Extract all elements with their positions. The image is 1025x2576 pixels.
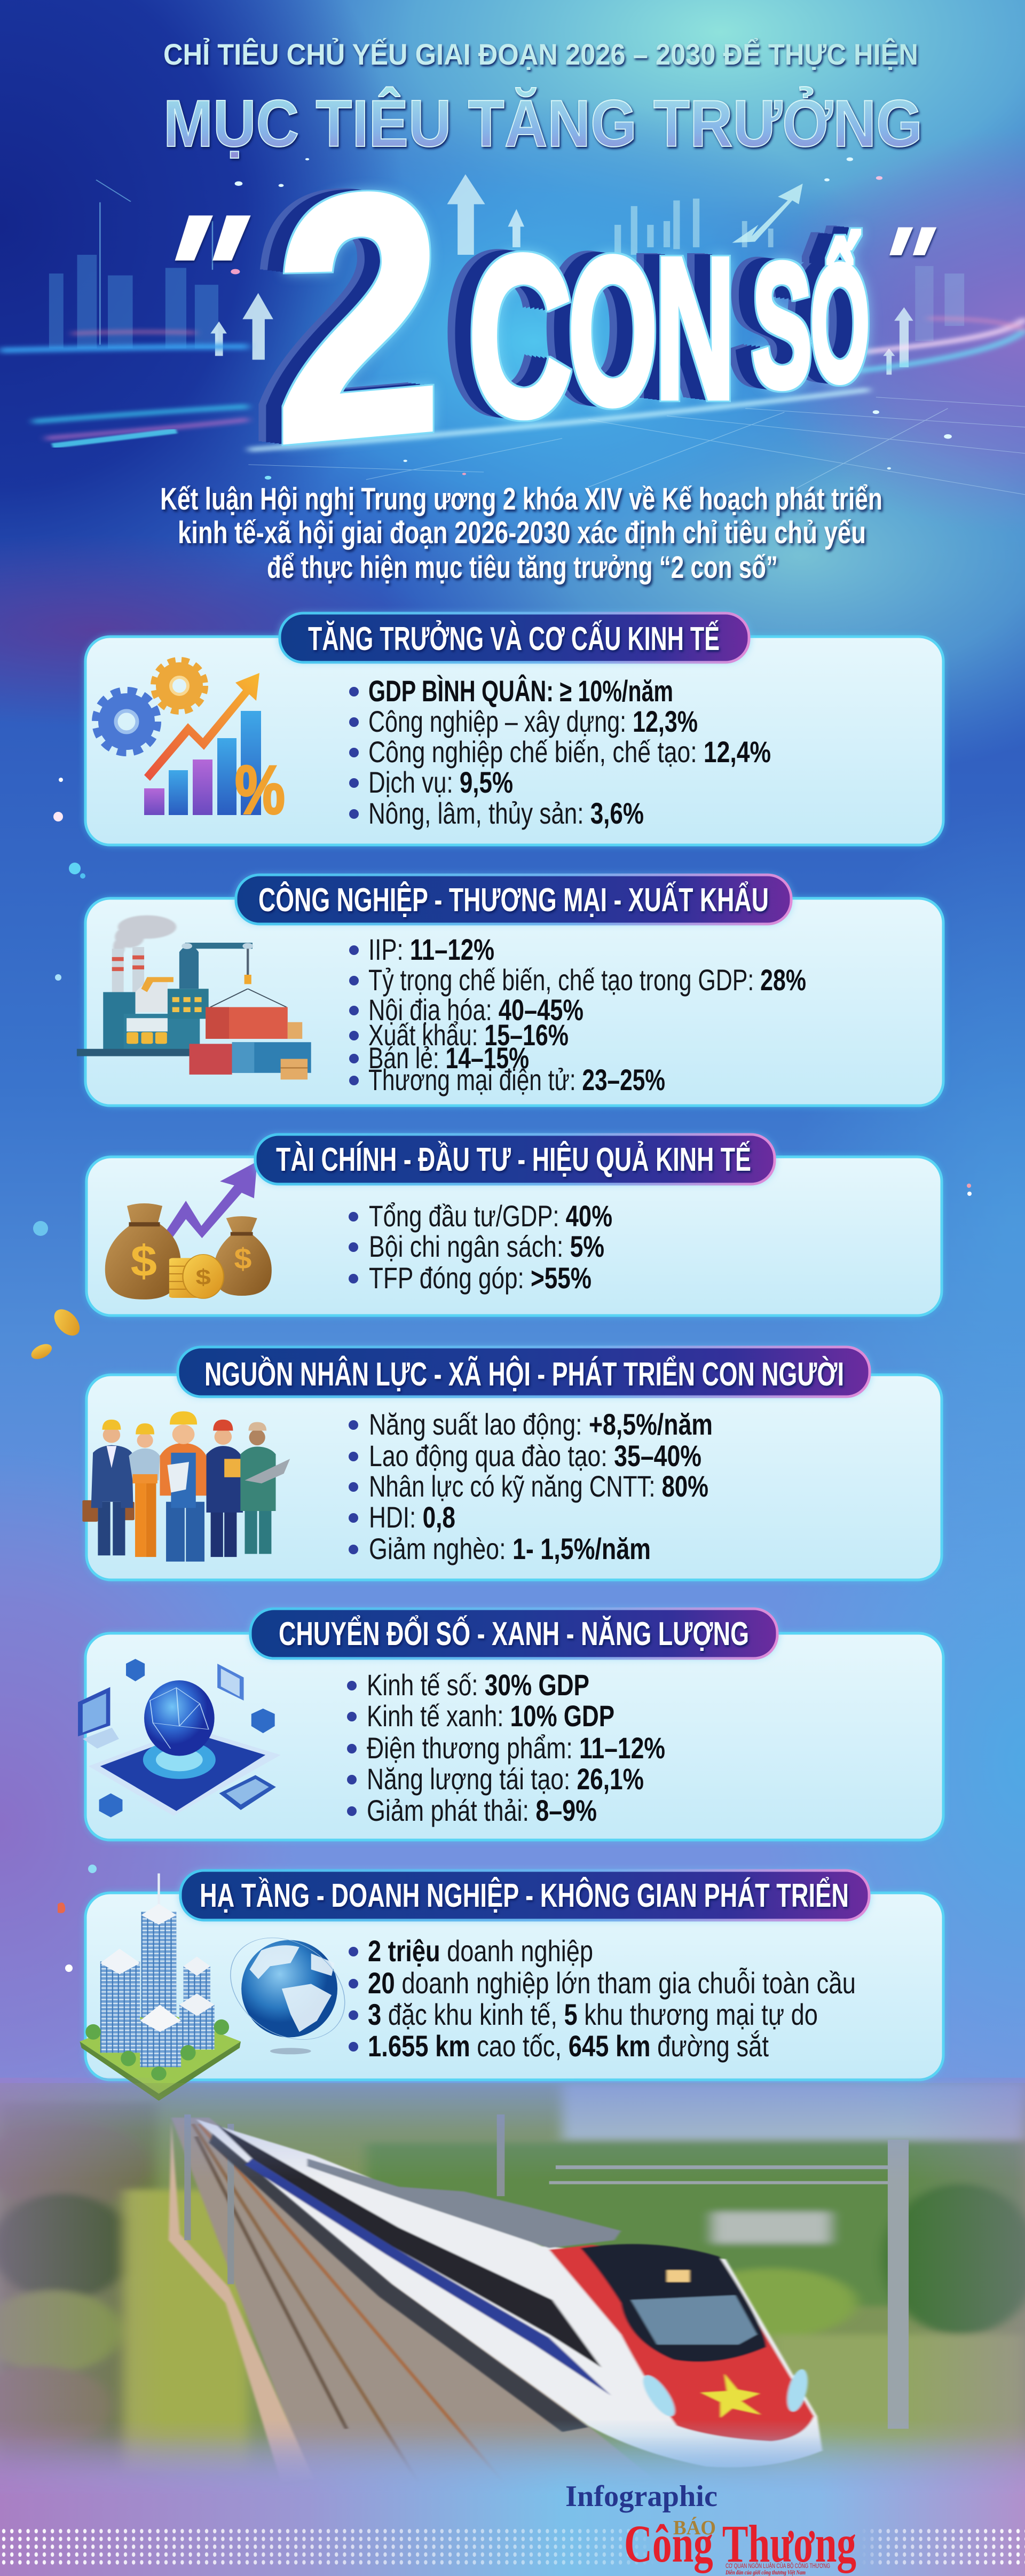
list: Thương mại điện tử: 23–25%	[368, 1063, 665, 1097]
light streaks	[0, 318, 1025, 450]
list: Công nghiệp chế biến, chế tạo: 12,4%	[368, 735, 771, 769]
heading pill	[279, 613, 750, 662]
list: 1.655 km cao tốc, 645 km đường sắt	[368, 2029, 769, 2063]
white up arrows	[210, 174, 913, 375]
words CON SỐ	[468, 208, 870, 464]
title line 2: MỤC TIÊU TĂNG TRƯỞNG	[163, 87, 922, 161]
logo: Báo Công Thương: CƠ QUAN NGÔN LUẬN CỦA BỘ CÔNG THƯƠNG	[726, 2562, 830, 2570]
list: Bội chi ngân sách: 5%	[369, 1230, 604, 1263]
worker 5	[240, 1422, 290, 1554]
list	[349, 1199, 612, 1295]
list	[349, 933, 806, 1097]
heading pill: TÀI CHÍNH - ĐẦU TƯ - HIỆU QUẢ KINH TẾ	[276, 1141, 751, 1178]
list: Điện thương phẩm: 11–12%	[367, 1731, 665, 1765]
icon: earth globe	[212, 1931, 363, 2054]
logo: Báo Công Thương: BÁO	[673, 2517, 716, 2539]
worker 3	[160, 1411, 207, 1562]
sparkle dots	[231, 158, 952, 480]
list: Tỷ trọng chế biến, chế tạo trong GDP: 28%	[368, 963, 806, 997]
list: 3 đặc khu kinh tế, 5 khu thương mại tự do	[368, 1998, 818, 2031]
photo edge tint	[0, 2078, 1025, 2489]
heading pill: TĂNG TRƯỞNG VÀ CƠ CẤU KINH TẾ	[308, 621, 720, 657]
list: Xuất khẩu: 15–16%	[368, 1018, 569, 1052]
floating particles	[33, 778, 972, 1972]
intro paragraph: để thực hiện mục tiêu tăng trưởng “2 con số”	[267, 550, 778, 585]
words CON SỐ: S	[752, 226, 812, 424]
photo: high-speed train on railway	[0, 2083, 1025, 2492]
icon: city block on green base	[80, 1874, 241, 2101]
words CON SỐ: Ố	[810, 231, 870, 416]
icon: floating gold coins	[27, 1308, 84, 1360]
numeral 2: 2	[276, 118, 441, 514]
gantry mast	[549, 2140, 909, 2429]
list	[349, 1934, 856, 2063]
list: HDI: 0,8	[369, 1500, 455, 1534]
dotted band	[0, 2527, 1025, 2566]
opening quote: "	[118, 176, 277, 378]
list: Lao động qua đào tạo: 35–40%	[369, 1439, 701, 1473]
worker 1	[82, 1420, 135, 1555]
logo: Báo Công Thương: Diễn đàn của giới công thương Việt Nam	[725, 2569, 806, 2576]
icon: gears, bars and growth arrow	[96, 661, 285, 828]
title line 1: CHỈ TIÊU CHỦ YẾU GIAI ĐOẠN 2026 – 2030 ĐỂ THỰC HIỆN	[163, 37, 918, 71]
trackbed	[171, 2117, 634, 2465]
icon: money bags and arrow: $	[196, 1265, 211, 1289]
words CON SỐ: C	[468, 208, 572, 464]
big 3D headline: "2 CON SỐ"	[118, 118, 953, 514]
growth zigzag arrow	[732, 184, 803, 243]
bottom colour band	[0, 2420, 1025, 2576]
heading pill	[177, 1347, 871, 1397]
perspective grid	[248, 397, 1025, 495]
train undercarriage	[209, 2127, 588, 2432]
heading pill: CÔNG NGHIỆP - THƯƠNG MẠI - XUẤT KHẨU	[258, 882, 769, 919]
worker 2	[129, 1423, 160, 1557]
list: Nội địa hóa: 40–45%	[368, 993, 584, 1027]
panel: finance, investment, efficiency	[86, 1134, 942, 1316]
list: Năng suất lao động: +8,5%/năm	[369, 1407, 713, 1441]
hero decoration: city, arrows, charts and light streaks	[0, 158, 1025, 495]
list: 2 triệu doanh nghiệp	[368, 1934, 593, 1968]
list: Công nghiệp – xây dựng: 12,3%	[368, 704, 698, 738]
list: GDP BÌNH QUÂN: ≥ 10%/năm	[368, 674, 673, 708]
intro paragraph	[160, 482, 882, 585]
heading pill	[254, 1134, 776, 1184]
panel: industry, trade, export	[77, 875, 943, 1106]
logo: Báo Công Thương: Công Thương	[624, 2514, 856, 2573]
list: Giảm nghèo: 1- 1,5%/năm	[369, 1532, 651, 1565]
list: Năng lượng tái tạo: 26,1%	[367, 1762, 644, 1796]
icon: factory, crane and containers	[77, 915, 311, 1079]
list: Bán lẻ: 14–15%	[368, 1041, 529, 1075]
icon: group of five workers	[82, 1411, 290, 1562]
scenery	[0, 2083, 1025, 2479]
worker 4	[207, 1420, 243, 1557]
panel: infrastructure, enterprise, development space	[80, 1870, 943, 2101]
list: Kinh tế số: 30% GDP	[367, 1668, 589, 1702]
list: Nông, lâm, thủy sản: 3,6%	[368, 796, 644, 830]
panel: economic growth and structure	[85, 613, 943, 845]
list	[349, 1407, 713, 1565]
icon: money bags and arrow	[105, 1162, 272, 1299]
train body	[196, 2119, 822, 2468]
heading pill	[179, 1870, 870, 1920]
panel: digital, green, energy	[78, 1609, 943, 1840]
heading pill: CHUYỂN ĐỔI SỐ - XANH - NĂNG LƯỢNG	[279, 1615, 749, 1653]
footer label: Infographic	[565, 2480, 718, 2513]
list: Giảm phát thải: 8–9%	[367, 1794, 597, 1827]
words CON SỐ: N	[656, 217, 735, 441]
list: Dịch vụ: 9,5%	[368, 765, 513, 799]
list: IIP: 11–12%	[368, 933, 494, 966]
pale bar chart	[614, 199, 774, 259]
list: 20 doanh nghiệp lớn tham gia chuỗi toàn cầu	[368, 1966, 856, 2000]
closing quote: "	[854, 203, 953, 328]
list: Kinh tế xanh: 10% GDP	[367, 1699, 614, 1733]
heading pill	[235, 875, 792, 924]
list: Tổng đầu tư/GDP: 40%	[369, 1199, 612, 1233]
icon: money bags and arrow: $	[131, 1236, 157, 1286]
poles	[184, 2115, 504, 2284]
icon: money bags and arrow: $	[234, 1242, 251, 1275]
icon: gears, bars and growth arrow: %	[235, 751, 285, 828]
list: TFP đóng góp: >55%	[369, 1261, 592, 1295]
words CON SỐ: O	[568, 215, 658, 448]
list	[347, 1668, 665, 1827]
panel: human resources, society	[82, 1347, 942, 1580]
list: Nhân lực có kỹ năng CNTT: 80%	[369, 1469, 708, 1503]
icon: digital globe on tablet	[78, 1659, 281, 1818]
heading pill	[249, 1609, 778, 1658]
list	[349, 674, 771, 830]
